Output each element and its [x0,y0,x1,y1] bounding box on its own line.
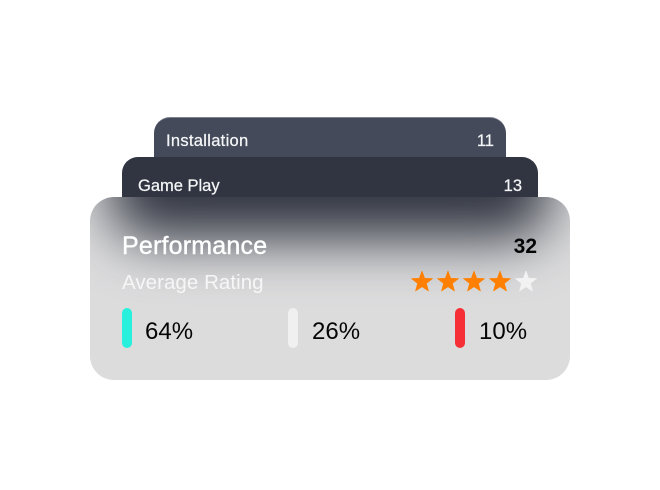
value: 32: 32 [514,235,537,258]
bar: white [288,308,298,348]
panel: installation card [154,117,506,177]
icon: star rating [411,270,537,292]
blurred shadow [110,117,550,239]
value: 13: 13 [504,177,522,195]
bar: teal [122,308,132,348]
value: 11: 11 [477,132,494,150]
bar: red [455,308,465,348]
value: 64%: 64% [145,318,193,345]
label: Installation: Installation [166,132,248,150]
panel: game play card [122,157,538,217]
value: 10%: 10% [479,318,527,345]
panel: performance card [90,197,570,380]
value: 26%: 26% [312,318,360,345]
label: Game Play: Game Play [138,177,220,195]
label: Average Rating: Average Rating [122,271,264,294]
heading: Performance: Performance [122,232,267,260]
